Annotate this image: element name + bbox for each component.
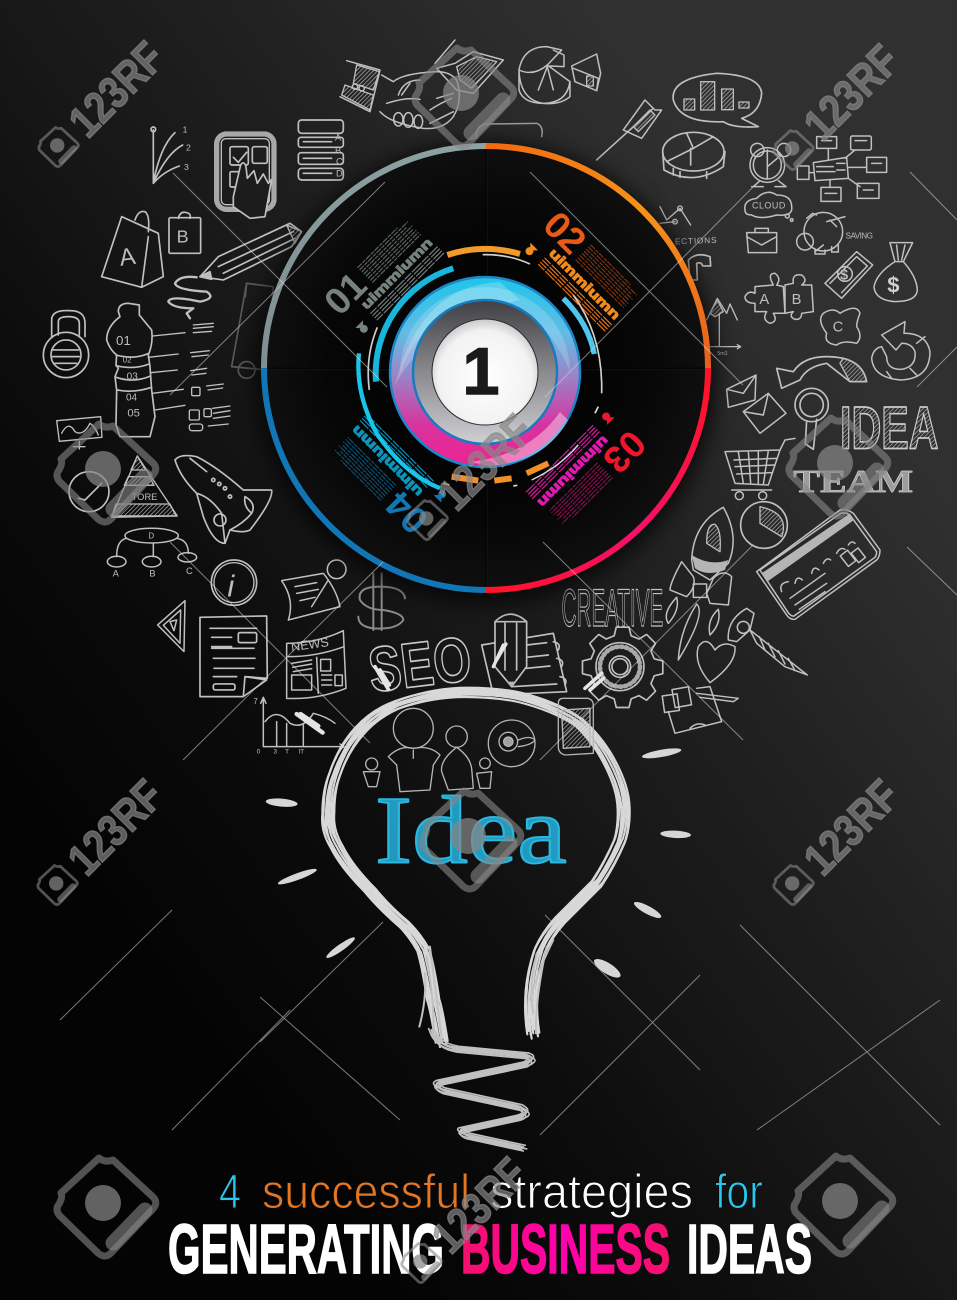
progress arcs xyxy=(358,249,602,488)
gloss ring xyxy=(390,277,580,467)
doodles: top left cluster xyxy=(43,125,302,378)
icon: briefcase xyxy=(747,228,777,253)
icon: org tree: D xyxy=(148,532,154,541)
watermark icon: right xyxy=(789,418,888,516)
icon: shopping bag A xyxy=(102,211,163,287)
icon: org tree xyxy=(107,528,197,579)
icon: gear xyxy=(582,627,663,707)
watermark: disc centre xyxy=(388,403,545,559)
icon: bottle callouts xyxy=(148,323,230,431)
rule lines 02 xyxy=(538,258,612,331)
pin 01 xyxy=(355,320,370,335)
doodle: database stack: D xyxy=(336,169,343,179)
icon: line chart: IT xyxy=(298,748,304,755)
icon: space shuttle xyxy=(175,456,272,543)
icon: speech bubble with coins xyxy=(673,73,762,127)
icon: newspaper xyxy=(287,631,346,699)
glossy centre button xyxy=(390,277,580,467)
section 04 xyxy=(322,413,451,542)
doodles: top right cluster xyxy=(660,73,930,388)
icon: notebook and pencil xyxy=(482,614,567,695)
doodles: left column xyxy=(57,303,272,697)
icon: pie chart xyxy=(741,502,787,548)
icon: line chart: 0 xyxy=(257,748,261,755)
text: SEO: SEO xyxy=(365,624,475,706)
disc shadow xyxy=(256,142,716,602)
icon: line chart: 3 xyxy=(273,748,277,755)
icon: pyramid: TORE xyxy=(132,492,157,502)
text: TEAM: TEAM xyxy=(793,463,913,499)
icon: numbered bottle: 01 xyxy=(116,333,131,348)
icon: org tree: A xyxy=(113,569,120,579)
icon: shopping bag B xyxy=(169,212,201,253)
icon: info circle: i xyxy=(227,570,235,604)
icon: check circle xyxy=(69,472,109,512)
number 1: 1 xyxy=(463,334,499,408)
lightbulb sketch xyxy=(265,688,691,1047)
icon: line chart: T xyxy=(285,748,289,755)
watermark icon: centre xyxy=(422,791,521,889)
icon: clipboard and pen xyxy=(662,687,738,733)
rule lines 04 xyxy=(360,414,433,488)
icon: numbered bottle xyxy=(107,303,155,437)
doodles: right middle cluster xyxy=(725,375,939,619)
doodle: database stack: A xyxy=(335,133,342,143)
ring segment: grey xyxy=(264,146,486,368)
watermark: top right: 123RF xyxy=(794,35,909,150)
icon: document xyxy=(200,616,267,697)
watermark icon: bottom left xyxy=(57,1158,156,1256)
icon: pencil with squiggle xyxy=(168,223,302,318)
filament sketch xyxy=(429,1028,535,1151)
rule lines 01 xyxy=(370,247,444,320)
heading 01: uimmiumn xyxy=(358,235,435,312)
subtitle: successful xyxy=(262,1166,470,1219)
icon: newspaper: NEWS xyxy=(290,635,330,654)
icon: dollar sign xyxy=(358,573,405,630)
icon: growth arrows xyxy=(151,125,191,183)
icon: tablet with hand xyxy=(217,134,274,218)
main title: BUSINESS xyxy=(461,1210,670,1288)
icon: heart xyxy=(697,642,735,683)
icon: puzzle pieces A B: B xyxy=(792,292,801,308)
doodles: top centre cluster xyxy=(340,40,662,160)
number 04: 04 xyxy=(377,483,436,542)
heading 03: uimmiumn xyxy=(535,433,612,510)
icon: numbered bottle: 05 xyxy=(127,408,140,420)
text block 01 xyxy=(357,219,421,283)
section 03 xyxy=(525,407,654,536)
fold lines xyxy=(266,148,706,588)
doodles: bottom left cluster xyxy=(253,560,346,755)
neck scribbles xyxy=(419,940,553,1037)
icon: org tree: C xyxy=(186,566,193,576)
icon: necktie xyxy=(728,608,807,675)
watermark: third row right: 123RF xyxy=(794,770,909,885)
icon: money bag xyxy=(874,243,917,302)
icon: curved arrow xyxy=(777,357,867,388)
icon: growth arrows: 1 xyxy=(183,125,188,135)
diagonal fold lines xyxy=(60,172,957,1135)
icon: puzzle pieces A B: A xyxy=(759,292,769,308)
main title: GENERATING xyxy=(168,1210,444,1288)
disc body xyxy=(264,146,708,590)
icon: money bag: $ xyxy=(887,273,900,298)
watermark: top right xyxy=(754,33,911,189)
icon: mind map xyxy=(797,136,887,201)
subtitle: 4 xyxy=(219,1166,241,1219)
icon: 3d pie chart xyxy=(663,132,725,178)
watermark icon: bottom right xyxy=(794,1156,893,1254)
watermark: bottom centre xyxy=(382,1146,539,1300)
icon: growth arrows: 2 xyxy=(186,143,191,153)
icon: monitor graph xyxy=(57,417,102,449)
watermark: top left xyxy=(19,30,176,186)
icon: line chart: 7 xyxy=(253,697,258,706)
icon: puzzle piece C xyxy=(821,308,860,345)
doodle: database stack: B xyxy=(335,145,341,155)
icon: credit card xyxy=(757,510,880,619)
main title: IDEAS xyxy=(687,1210,812,1288)
ring segment: red xyxy=(486,368,708,590)
pin 02 xyxy=(523,243,538,258)
icon: mountain chart: 5m1 xyxy=(717,351,728,357)
icon: 3d pie chart slice xyxy=(519,47,601,104)
icon: circular arrow xyxy=(872,322,930,380)
rule lines 03 xyxy=(526,425,600,499)
ring segment: blue xyxy=(264,368,486,590)
icon: banknote: $ xyxy=(840,267,848,283)
panel: circular strategy disc xyxy=(264,146,708,590)
doodle: database stack xyxy=(298,120,343,180)
doodles: centre bottom row xyxy=(358,573,663,707)
bulb outline strokes xyxy=(322,688,630,1047)
text block 02 xyxy=(576,245,639,308)
icon: piggy bank: SAVING xyxy=(846,232,873,241)
subtitle: for xyxy=(715,1166,763,1219)
subtitle: strategies xyxy=(490,1166,693,1219)
watermark: third row right xyxy=(754,768,911,924)
section 02 xyxy=(520,203,649,332)
icon: usb stick xyxy=(232,283,273,378)
icon: magnifier xyxy=(795,388,828,449)
icon: cloud label xyxy=(745,192,793,221)
text: CREATIVE xyxy=(562,579,663,638)
text block 04 xyxy=(333,437,396,500)
watermark: top left: 123RF xyxy=(59,32,174,147)
icon: numbered bottle: 02 xyxy=(123,356,132,365)
subtitle xyxy=(219,1166,763,1219)
icon: coffee cup xyxy=(488,720,535,767)
inner well xyxy=(413,300,557,444)
icon: triangle tag xyxy=(158,601,185,652)
number 03: 03 xyxy=(595,423,654,482)
watermark: third row left xyxy=(18,768,175,924)
white face xyxy=(432,319,538,425)
icon: mountain chart xyxy=(707,298,741,357)
text: sections label: ECTIONS xyxy=(675,235,717,246)
icon: padlock xyxy=(43,311,89,378)
ring segment: orange xyxy=(486,146,708,368)
icon: banknote xyxy=(825,252,873,298)
icon: magnet xyxy=(688,255,711,280)
icon: pinned note xyxy=(282,560,346,620)
icon: info circle xyxy=(211,560,257,605)
pin 03 xyxy=(600,410,615,425)
number 02: 02 xyxy=(536,203,595,262)
title block xyxy=(168,1166,812,1288)
doodle: database stack: C xyxy=(336,157,343,167)
pin 04 xyxy=(434,488,449,503)
ring highlights xyxy=(400,287,570,372)
icon: numbered bottle: 03 xyxy=(127,371,138,382)
doodles: right lower cluster xyxy=(662,507,807,733)
icon: numbered bottle: 04 xyxy=(126,393,138,404)
watermark: disc centre: 123RF xyxy=(428,405,543,520)
icon: puzzle piece C: C xyxy=(833,320,844,336)
watermark icon: top centre xyxy=(415,48,514,146)
icon: hidden device xyxy=(476,123,542,138)
icon: rocket xyxy=(666,507,733,660)
icon: piggy bank xyxy=(797,212,873,254)
icon: shopping bag B: B xyxy=(177,227,189,247)
icon: alarm clock xyxy=(750,143,791,187)
icon: team figures xyxy=(363,708,492,792)
text block 03 xyxy=(549,463,612,526)
watermark icon: left xyxy=(57,424,156,522)
icon: cloud label: CLOUD xyxy=(752,200,786,210)
heading 02: uimmiumn xyxy=(546,246,623,323)
icon: org tree: B xyxy=(149,569,156,579)
watermark: third row left: 123RF xyxy=(58,770,173,885)
light rays xyxy=(265,746,691,981)
number 01: 01 xyxy=(316,264,375,323)
watermark: bottom centre: 123RF xyxy=(422,1148,537,1263)
icon: pyramid xyxy=(112,456,177,517)
section 01 xyxy=(316,209,445,338)
icon: line chart xyxy=(253,697,344,755)
text: Idea: Idea xyxy=(375,776,567,883)
icon: growth arrows: 3 xyxy=(184,162,189,172)
icon: shopping bag A: A xyxy=(118,243,137,272)
heading 04: uimmiumn xyxy=(348,423,425,500)
icon: handshake xyxy=(340,40,503,129)
icon: network links xyxy=(660,206,691,225)
icon: smartphone xyxy=(558,698,593,755)
icon: puzzle pieces A B xyxy=(745,273,813,323)
icon: arrow and target xyxy=(597,100,662,160)
inner details xyxy=(316,203,654,542)
icon: envelopes xyxy=(727,375,786,433)
icon: shopping cart xyxy=(725,438,795,500)
